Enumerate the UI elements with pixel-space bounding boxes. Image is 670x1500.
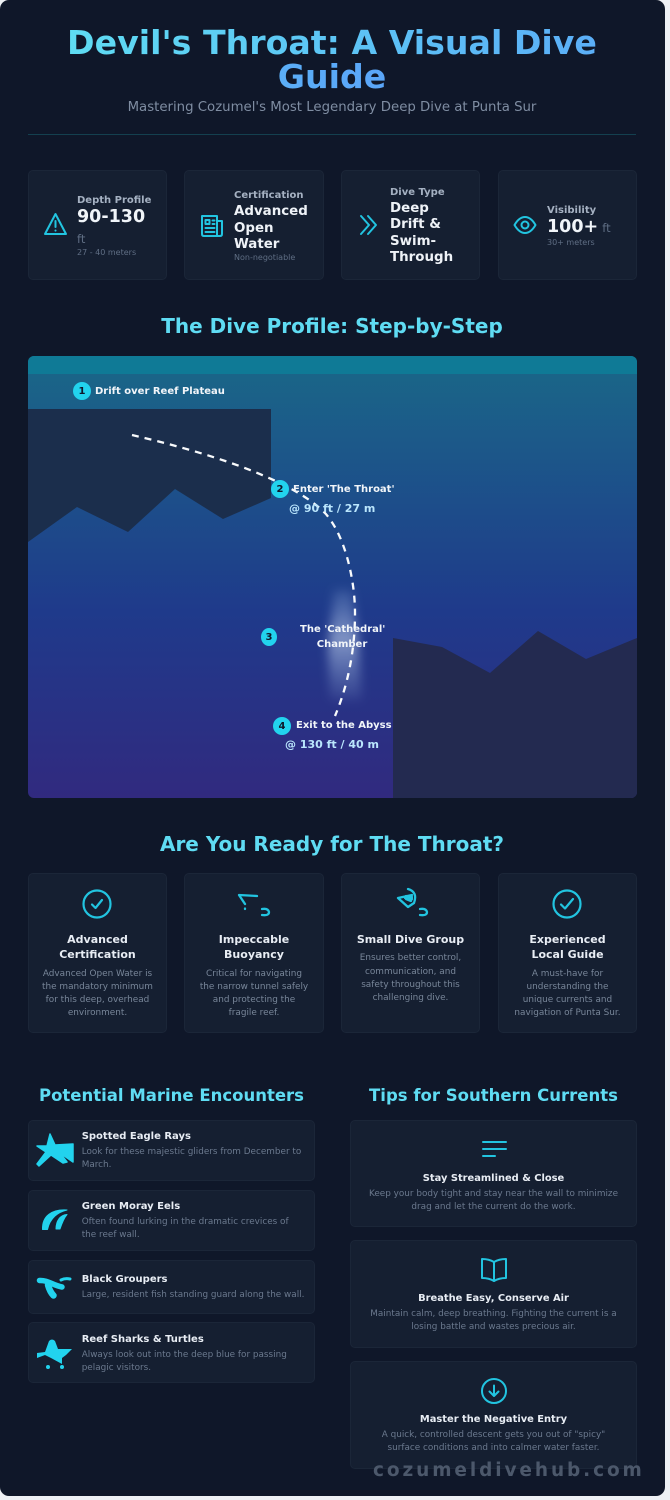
left reef wall <box>28 409 271 542</box>
text block <box>200 933 308 1018</box>
text block: the narrow tunnel safely <box>200 982 308 992</box>
text block: fragile reef. <box>229 1008 279 1018</box>
watermark: cozumeldivehub.com <box>373 1460 645 1481</box>
icon: broken buoyancy glyph <box>238 894 270 916</box>
icon: double chevron <box>360 215 377 235</box>
step 3 marker: 3 <box>266 632 272 643</box>
step 1 marker: Drift over Reef Plateau <box>95 386 225 397</box>
heading: are you ready: Are You Ready for The Throat? <box>160 832 504 856</box>
text block: Reef Sharks & Turtles <box>82 1334 204 1345</box>
text block: Impeccable <box>219 933 289 946</box>
icon: shark and turtle <box>37 1340 72 1369</box>
step 2 marker: 2 <box>277 484 283 495</box>
text block: pelagic visitors. <box>82 1363 151 1373</box>
step 2 marker: Enter 'The Throat' <box>293 484 395 495</box>
panel: stat certification <box>184 170 324 280</box>
text block <box>82 1201 289 1240</box>
label: dive type: Dive Type <box>390 187 445 198</box>
text block <box>82 1131 301 1170</box>
text block: Keep your body tight and stay near the wall to minimize <box>369 1189 618 1199</box>
text block <box>370 1293 617 1332</box>
panel: experienced local guide <box>498 873 637 1033</box>
text block <box>42 933 153 1018</box>
title: Guide <box>278 57 386 96</box>
text block: Local Guide <box>531 948 604 961</box>
cathedral light glow <box>328 590 362 700</box>
icon: warning triangle <box>44 213 67 235</box>
text block <box>514 933 621 1018</box>
text block: navigation of Punta Sur. <box>514 1008 621 1018</box>
text block: March. <box>82 1160 111 1170</box>
value: deep drift and swim-through: Drift & <box>390 217 441 232</box>
text block: environment. <box>68 1008 127 1018</box>
text block: drag and let the current do the work. <box>411 1202 576 1212</box>
panel: stat dive type <box>341 170 480 280</box>
panel: stat visibility <box>498 170 637 280</box>
panel: advanced certification <box>28 873 167 1033</box>
text block: Breathe Easy, Conserve Air <box>418 1293 569 1304</box>
icon: moray eel <box>42 1209 68 1230</box>
text block: Spotted Eagle Rays <box>82 1131 191 1142</box>
text block: Look for these majestic gliders from December to <box>82 1147 301 1157</box>
text block: the reef wall. <box>82 1230 140 1240</box>
text block: surface conditions and into calmer water faster. <box>388 1443 599 1453</box>
icon: arrow down circle <box>481 1378 507 1404</box>
panel: stay streamlined <box>350 1120 637 1227</box>
icon: check circle <box>82 889 112 919</box>
panel: reef sharks and turtles <box>28 1322 315 1383</box>
value: advanced open water <box>234 204 308 252</box>
text block: Large, resident fish standing guard along the wall. <box>82 1290 304 1300</box>
step 1 marker: 1 <box>79 386 85 397</box>
step 3 marker <box>261 624 385 650</box>
text block: Advanced <box>67 933 128 946</box>
title: Devil's Throat: A Visual Dive <box>67 23 597 62</box>
heading: tips for southern currents: Tips for Southern Currents <box>369 1086 618 1105</box>
text block: Buoyancy <box>224 948 284 961</box>
text block <box>82 1274 304 1300</box>
text block: losing battle and wastes precious air. <box>411 1322 576 1332</box>
step 2 marker: @ 90 ft / 27 m <box>289 502 375 515</box>
text block: understanding the <box>527 982 608 992</box>
text block <box>369 1173 618 1212</box>
icon: lines <box>482 1141 507 1157</box>
step 4 marker: Exit to the Abyss <box>296 720 392 731</box>
text block: Always look out into the deep blue for passing <box>82 1350 287 1360</box>
panel: spotted eagle rays <box>28 1120 315 1181</box>
text block: Maintain calm, deep breathing. Fighting the current is a <box>370 1309 617 1319</box>
text block: Often found lurking in the dramatic crevices of <box>82 1217 289 1227</box>
text block <box>357 933 464 1003</box>
dive path <box>132 435 355 716</box>
step 3 marker: The 'Cathedral' <box>300 624 385 635</box>
text block: the mandatory minimum <box>42 982 153 992</box>
right reef wall <box>393 631 637 798</box>
text block: A quick, controlled descent gets you out of "spicy" <box>382 1430 605 1440</box>
value: 90-130: 90-130 <box>77 207 145 227</box>
panel: negative entry <box>350 1361 637 1469</box>
value: deep drift and swim-through: Deep <box>390 201 429 216</box>
value: advanced open water: Advanced <box>234 204 308 219</box>
text block: Advanced Open Water is <box>43 969 152 979</box>
text block <box>82 1334 287 1373</box>
value: advanced open water: Open <box>234 221 274 236</box>
step 2 marker <box>271 480 395 515</box>
text block: Stay Streamlined & Close <box>423 1173 564 1184</box>
step 4 marker <box>273 717 392 751</box>
icon: open book <box>481 1258 507 1282</box>
text block: and protecting the <box>213 995 295 1005</box>
heading: potential marine encounters: Potential Marine Encounters <box>39 1086 304 1105</box>
note: non-negotiable: Non-negotiable <box>234 253 295 262</box>
step 4 marker: @ 130 ft / 40 m <box>285 738 379 751</box>
text block: Green Moray Eels <box>82 1201 180 1212</box>
text block: Experienced <box>529 933 606 946</box>
label: certification: Certification <box>234 190 304 201</box>
value: 100+ ft: 100+ ft <box>547 217 611 237</box>
step 3 marker: Chamber <box>317 639 367 650</box>
unit: ft: ft <box>77 232 85 246</box>
text block: challenging dive. <box>373 993 448 1003</box>
note: meters: 27 - 40 meters <box>77 248 136 257</box>
value: deep drift and swim-through <box>390 201 453 265</box>
label: visibility: Visibility <box>547 205 596 216</box>
text block: A must-have for <box>532 969 603 979</box>
panel: impeccable buoyancy <box>184 873 324 1033</box>
icon: eye <box>514 216 536 234</box>
panel: breathe easy <box>350 1240 637 1348</box>
text block: Black Groupers <box>82 1274 168 1285</box>
text block: communication, and <box>365 967 456 977</box>
text block: Small Dive Group <box>357 933 464 946</box>
text block: for this deep, overhead <box>46 995 149 1005</box>
step 4 marker: 4 <box>279 721 285 732</box>
icon: grouper <box>36 1277 72 1299</box>
label: depth profile: Depth Profile <box>77 195 151 206</box>
value: deep drift and swim-through: Through <box>390 250 453 265</box>
surface band <box>28 356 637 374</box>
value: deep drift and swim-through: Swim- <box>390 234 436 249</box>
text block: Ensures better control, <box>360 953 461 963</box>
text block: Master the Negative Entry <box>420 1414 567 1425</box>
note: 30+ meters: 30+ meters <box>547 238 595 247</box>
icon: broken group glyph <box>396 888 428 916</box>
text block <box>382 1414 605 1453</box>
icon: document <box>201 215 223 237</box>
icon: check circle <box>552 889 582 919</box>
text block: Certification <box>59 948 136 961</box>
chart: dive profile diagram <box>28 356 637 798</box>
title <box>67 23 597 96</box>
panel: black groupers <box>28 1260 315 1314</box>
text block: Critical for navigating <box>206 969 302 979</box>
panel: small dive group <box>341 873 480 1033</box>
panel: green moray eels <box>28 1190 315 1251</box>
text block: safety throughout this <box>361 980 460 990</box>
icon: eagle ray <box>36 1133 74 1167</box>
value: advanced open water: Water <box>234 237 279 252</box>
panel: stat depth profile <box>28 170 167 280</box>
text block: unique currents and <box>523 995 612 1005</box>
heading: the dive profile: The Dive Profile: Step-by-Step <box>161 314 503 338</box>
subtitle: Mastering Cozumel's Most Legendary Deep Dive at Punta Sur <box>128 100 536 115</box>
step 1 marker <box>73 382 225 400</box>
